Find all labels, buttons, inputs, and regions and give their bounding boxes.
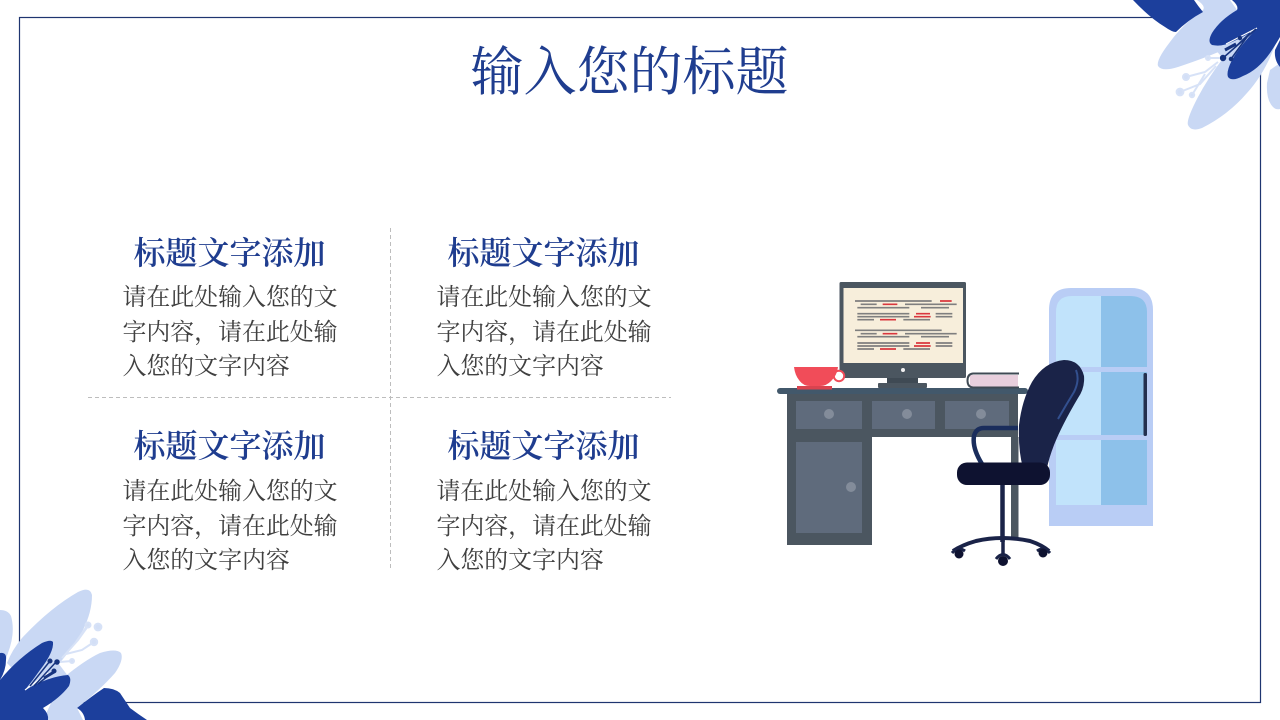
text block: top left xyxy=(122,284,338,380)
heading: bottom left: 标题文字添加 xyxy=(134,428,326,464)
text block: top left: 入您的文字内容 xyxy=(122,354,290,380)
text block: bottom left: 字内容，请在此处输 xyxy=(122,514,338,540)
text block: bottom left xyxy=(122,478,338,574)
text block: top left: 请在此处输入您的文 xyxy=(122,285,338,311)
text block: bottom right: 请在此处输入您的文 xyxy=(436,479,652,505)
text block: top right: 入您的文字内容 xyxy=(436,354,604,380)
text block: top left: 字内容，请在此处输 xyxy=(122,320,338,346)
heading: top left: 标题文字添加 xyxy=(134,235,326,271)
desk xyxy=(777,388,1028,545)
text block: top right: 字内容，请在此处输 xyxy=(436,320,652,346)
text block: top right xyxy=(436,284,652,380)
text block: bottom left: 入您的文字内容 xyxy=(122,548,290,574)
heading: top right: 标题文字添加 xyxy=(448,235,640,271)
text block: bottom left: 请在此处输入您的文 xyxy=(122,479,338,505)
text block: bottom right xyxy=(436,478,652,574)
text block: top right: 请在此处输入您的文 xyxy=(436,285,652,311)
office chair xyxy=(952,360,1084,566)
monitor xyxy=(840,282,966,388)
text block: bottom right: 入您的文字内容 xyxy=(436,548,604,574)
title: 输入您的标题 xyxy=(470,44,788,102)
cabinet xyxy=(1049,288,1153,526)
coffee cup xyxy=(794,367,844,390)
heading: bottom right: 标题文字添加 xyxy=(448,428,640,464)
book xyxy=(968,374,1019,388)
text block: bottom right: 字内容，请在此处输 xyxy=(436,514,652,540)
